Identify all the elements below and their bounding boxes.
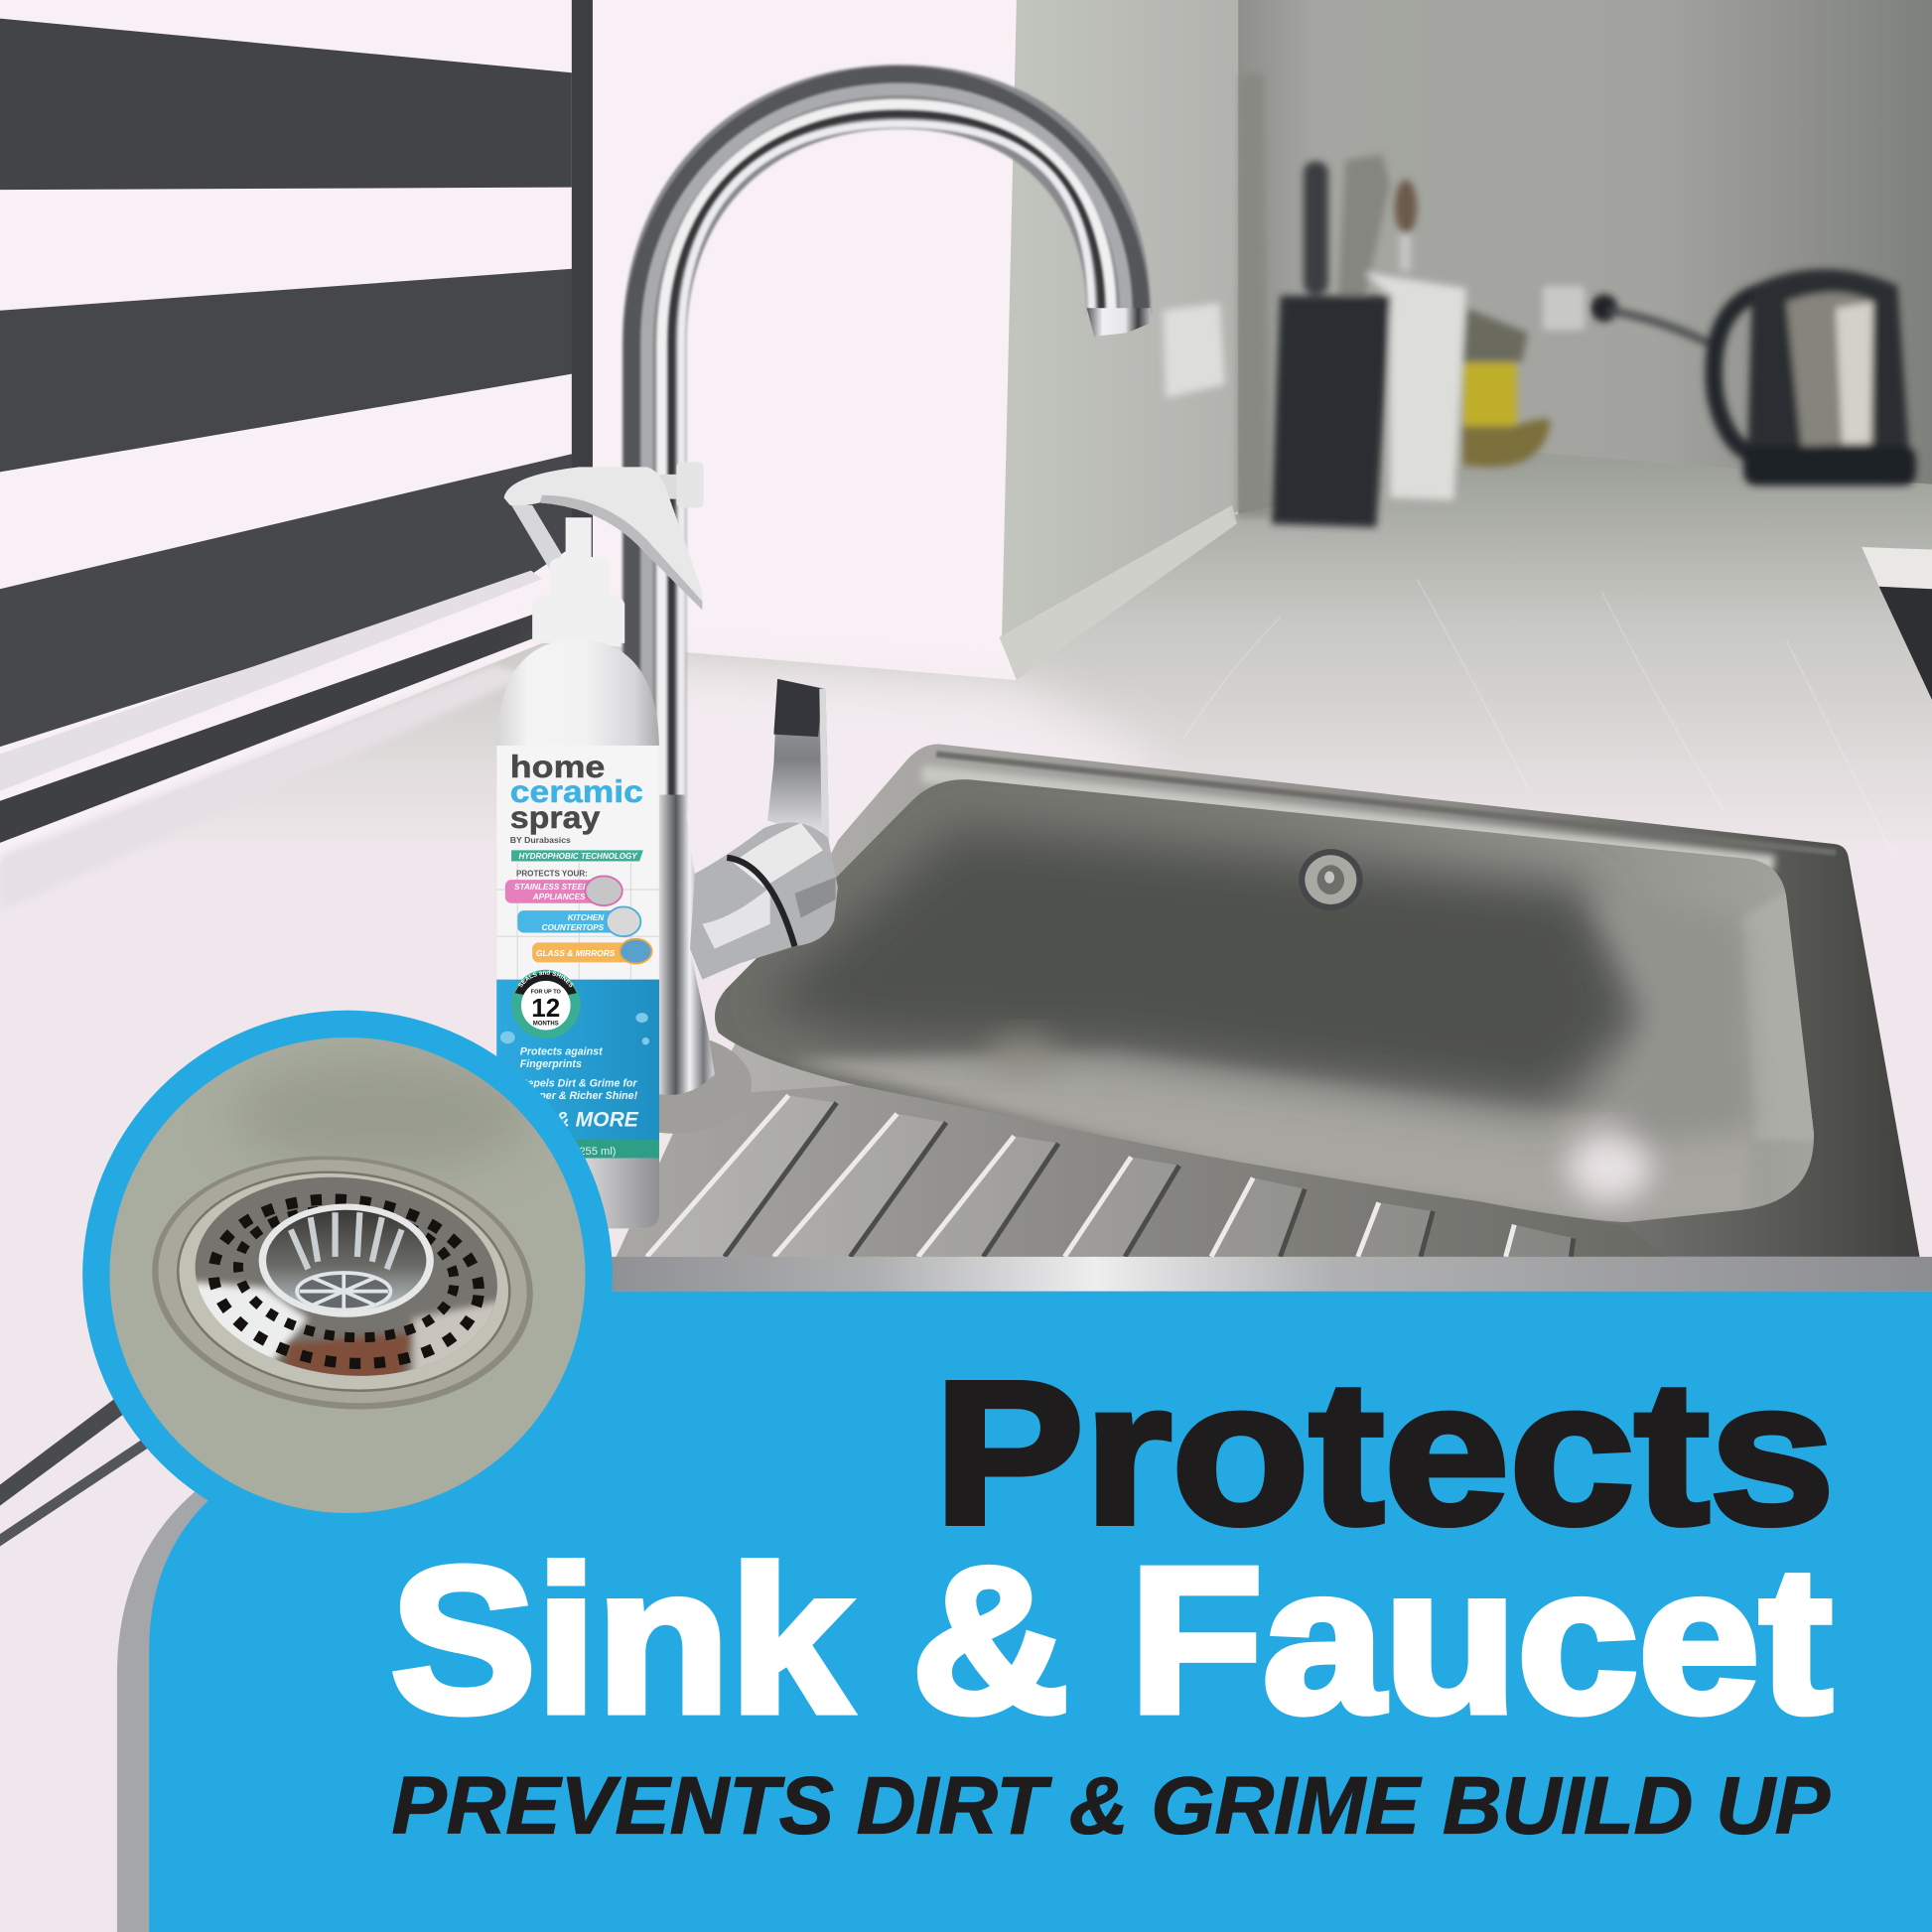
- drainboard: [617, 1084, 1666, 1257]
- orange pill: GLASS & MIRRORS: [536, 948, 616, 958]
- feature text: Fingerprints: [520, 1058, 582, 1070]
- power plug: [1543, 286, 1713, 345]
- basket: [1462, 419, 1551, 467]
- strainer slots inner: [232, 1200, 461, 1348]
- blue headline panel: [149, 1292, 1932, 1932]
- basin right wall: [1591, 888, 1753, 1146]
- knives: [1304, 154, 1417, 296]
- faucet lever: [767, 679, 829, 840]
- and more: & MORE: [555, 1108, 639, 1131]
- feature text: [520, 1045, 638, 1102]
- counter skirting: [1000, 505, 1237, 680]
- feature text: Deeper & Richer Shine!: [520, 1090, 638, 1102]
- outer flange: [139, 1138, 546, 1428]
- headline: Sink & Faucet: Sink & Faucet: [390, 1525, 1832, 1756]
- 12 months seal: FOR UP TO: [531, 989, 562, 995]
- rim lip highlight: [921, 773, 1774, 864]
- sink basin: [702, 763, 1836, 1232]
- feature text: Protects against: [520, 1045, 603, 1057]
- sink outer rim: [617, 745, 1920, 1257]
- 12 months seal: 12: [531, 993, 560, 1023]
- headline: [390, 1340, 1835, 1852]
- knife block: [1272, 296, 1391, 527]
- bowl grate: [297, 1273, 390, 1310]
- drainboard ridge faces: [647, 1095, 1574, 1257]
- corner shadow: [1237, 73, 1269, 517]
- bottle label: [496, 746, 659, 1159]
- bowl ribs: [291, 1212, 402, 1269]
- window blinds: [0, 0, 593, 843]
- basin lower light band: [788, 1047, 1749, 1226]
- faucet tip: [1087, 308, 1151, 337]
- overflow drain: [1299, 849, 1363, 910]
- blue pill: KITCHEN: [568, 913, 605, 922]
- word: spray: spray: [510, 800, 601, 835]
- faucet body: [659, 794, 715, 1095]
- hydrophobic bar: HYDROPHOBIC TECHNOLOGY: [518, 851, 638, 861]
- subheading: PREVENTS DIRT & GRIME BUILD UP: [392, 1761, 1830, 1852]
- stone shading: [234, 1059, 530, 1171]
- grey metallic band: [604, 1257, 1932, 1292]
- counter wood grain: [1182, 579, 1897, 863]
- 12 months seal: SEALS and SHINES: [518, 970, 574, 987]
- cup contents: [1462, 308, 1528, 362]
- counter window reflection: [0, 1392, 154, 1547]
- pink pill: [505, 876, 622, 905]
- centre bowl: [259, 1204, 434, 1317]
- back wall: [1232, 0, 1932, 517]
- drain assembly: [139, 1059, 546, 1428]
- drainboard ridges: dark: [725, 1103, 1574, 1257]
- bottle body: [496, 640, 659, 1228]
- faucet: [599, 74, 1151, 1134]
- counter cutout right: [1862, 547, 1932, 700]
- kitchen counter: [0, 452, 1932, 1932]
- faucet spout: [632, 74, 1141, 813]
- blue lower panel: [496, 980, 659, 1140]
- label background: [496, 746, 659, 980]
- 12 months seal: [511, 969, 580, 1038]
- rim top dark edge: [936, 755, 1836, 853]
- volume: (255 ml): [576, 1146, 617, 1158]
- faucet base plate: [599, 1035, 752, 1134]
- headline: Protects: Protects: [934, 1340, 1835, 1567]
- word: home: home: [510, 750, 605, 784]
- drainboard ridges: light: [647, 1095, 1514, 1257]
- basin glow: [986, 1033, 1059, 1077]
- blue pill: COUNTERTOPS: [542, 923, 605, 932]
- label tile lines: [496, 863, 659, 980]
- water droplets: [500, 1013, 649, 1044]
- bottle base: [496, 1159, 659, 1228]
- grey panel edge: [117, 1292, 617, 1932]
- inset circle: drain strainer: [82, 1011, 613, 1540]
- pink pill: APPLIANCES: [532, 893, 586, 901]
- bottle neck: [532, 557, 624, 643]
- stone surface: [109, 1037, 586, 1513]
- paper towel: [1364, 272, 1466, 500]
- product bottle: [496, 463, 703, 1229]
- pink pill: STAINLESS STEEL: [514, 883, 588, 892]
- basin specular highlight: [1568, 1134, 1651, 1202]
- orange pill: [532, 939, 652, 964]
- yellow cup: [1462, 362, 1517, 426]
- chrome strainer: [185, 1171, 505, 1386]
- strainer slots outer: [206, 1186, 487, 1376]
- teal strip: [496, 1140, 659, 1159]
- blurred shelf items: [1164, 73, 1916, 527]
- sink: [617, 745, 1920, 1257]
- basin dark floor: [758, 828, 1645, 1109]
- brand line: BY Durabasics: [510, 835, 571, 845]
- word: ceramic: ceramic: [510, 774, 643, 809]
- kettle: [1714, 269, 1916, 485]
- protects your: PROTECTS YOUR:: [516, 869, 588, 878]
- 12 months seal: MONTHS: [533, 1022, 559, 1028]
- feature text: Repels Dirt & Grime for: [520, 1078, 637, 1090]
- counter left bright area: [554, 653, 1146, 936]
- blue pill: [517, 906, 640, 936]
- basin right lip: [1743, 892, 1814, 1142]
- faucet handle housing: [690, 822, 838, 980]
- trigger sprayer: [504, 462, 704, 610]
- side wall: [1002, 0, 1238, 640]
- rail reflection strip on counter: [0, 665, 530, 911]
- wall socket: [1164, 303, 1225, 398]
- circle blue ring: [82, 1011, 613, 1540]
